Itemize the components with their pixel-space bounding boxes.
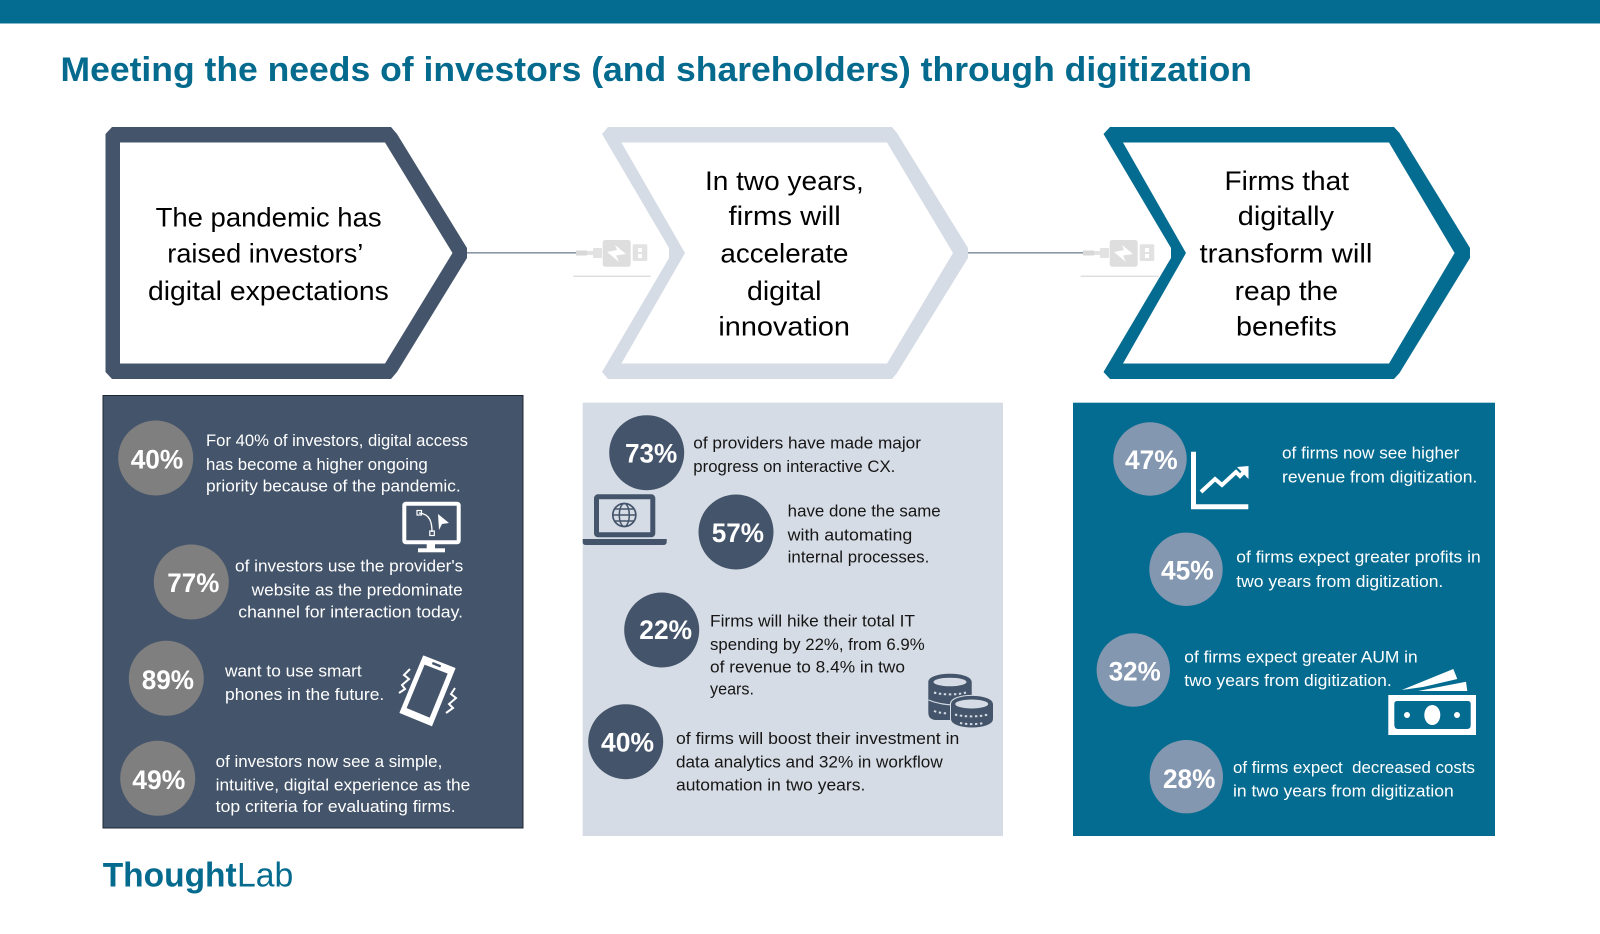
stat: 89% smart phones: phones in the future. [225,686,384,704]
stat: 49% digital experience: of investors now see a simple, [216,753,442,771]
chevron: reap the benefits: digitally [1238,201,1335,231]
stat: 89% smart phones: want to use smart [224,663,362,681]
stat: 77% website: website as the predominate [251,582,463,600]
stat: 49% digital experience: 49% [132,765,185,795]
stat: 40% data analytics: 40% [601,727,654,757]
stat: 49% digital experience: intuitive, digital experience as the [216,776,470,794]
chevron: reap the benefits [1104,127,1470,379]
stat: 28% decreased costs: of firms expect decreased costs [1233,759,1475,777]
stat: 47% higher revenue: 47% [1125,445,1178,475]
stat: 40% digital access: For 40% of investors, digital access [206,432,468,450]
stat: 73% interactive CX: progress on interactive CX. [693,458,895,476]
stat: 40% digital access: 40% [131,444,183,474]
stat: 40% data analytics: data analytics and 32% in workflow [676,754,943,772]
icon: vibrating smartphone [399,656,456,726]
panel: investors [103,396,523,828]
stat: 57% automating processes: have done the same [788,503,941,521]
icon: laptop with globe [583,497,667,545]
stat: 77% website: of investors use the provider's [235,558,463,576]
stat: 40% digital access: priority because of the pandemic. [206,478,461,496]
stat: 40% data analytics: of firms will boost their investment in [676,730,959,748]
chevron: accelerate innovation: firms will [728,201,841,231]
stat: 45% greater profits: of firms expect greater profits in [1236,548,1481,566]
chevron: pandemic expectations: digital expectations [148,276,389,306]
chevron: pandemic expectations: raised investors’ [167,239,363,269]
stat: 28% decreased costs [1150,740,1475,813]
stat: 45% greater profits: two years from digitization. [1236,573,1443,591]
stat: 47% higher revenue: revenue from digitization. [1282,468,1477,486]
stat: 40% digital access: has become a higher ongoing [206,456,428,474]
stat: 45% greater profits: 45% [1161,555,1214,585]
stat: 32% greater AUM [1097,633,1418,707]
top banner [0,0,1600,24]
stat: 22% IT spending: spending by 22%, from 6.9% [710,636,925,654]
icon: banknotes [1388,669,1476,735]
stat: 40% data analytics [588,704,959,795]
stat: 32% greater AUM: 32% [1109,656,1161,686]
chevron: accelerate innovation: In two years, [705,166,864,196]
stat: 89% smart phones [129,641,384,716]
stat: 47% higher revenue: of firms now see higher [1282,444,1460,462]
stat: 57% automating processes: internal processes. [788,548,929,566]
stat: 73% interactive CX [609,415,922,490]
stat: 77% website: 77% [167,568,219,598]
chevron: accelerate innovation [602,127,968,379]
chevron: reap the benefits: benefits [1236,312,1337,342]
chevron: accelerate innovation: digital [747,276,821,306]
stat: 22% IT spending: of revenue to 8.4% in two [710,659,905,677]
panel: benefits [1073,403,1495,836]
title: Meeting the needs of investors (and shareholders) through digitization [60,51,1252,89]
stat: 47% higher revenue [1113,422,1477,496]
stat: 89% smart phones: 89% [142,665,194,695]
stat: 28% decreased costs: in two years from digitization [1233,783,1454,801]
stat: 40% data analytics: automation in two years. [676,777,865,795]
stat: 32% greater AUM: of firms expect greater AUM in [1184,648,1418,666]
stat: 77% website [154,544,463,621]
chevron: pandemic expectations [106,127,467,379]
logo: ThoughtLab: Lab [237,857,293,895]
icon: stacks of coins [928,674,994,728]
stat: 45% greater profits [1149,533,1481,606]
stat: 22% IT spending [624,592,925,699]
stat: 57% automating processes: 57% [712,518,764,548]
stat: 77% website: channel for interaction today. [238,603,463,621]
stat: 28% decreased costs: 28% [1163,764,1215,794]
chevron: accelerate innovation: innovation [718,312,850,342]
stat: 22% IT spending: years. [710,681,754,699]
logo: ThoughtLab: Thought [103,857,237,895]
chevron: accelerate innovation: accelerate [720,238,848,268]
arrow: connector from first to second chevron [467,240,651,277]
stat: 32% greater AUM: two years from digitization. [1184,672,1392,690]
stat: 49% digital experience [120,741,470,816]
stat: 22% IT spending: 22% [639,615,692,645]
chevron: reap the benefits: transform will [1200,238,1372,268]
stat: 57% automating processes: with automating [787,527,912,545]
arrow: connector from second to third chevron [968,240,1159,277]
icon: monitor with vector cursor [404,504,459,552]
stat: 22% IT spending: Firms will hike their total IT [710,612,915,630]
stat: 57% automating processes [698,494,941,570]
chevron: pandemic expectations: The pandemic has [156,203,382,233]
chevron: reap the benefits: reap the [1235,276,1338,306]
stat: 73% interactive CX: 73% [625,438,677,468]
chevron: reap the benefits: Firms that [1224,166,1350,196]
panel: digital innovation [583,403,1003,836]
stat: 40% digital access [118,420,468,496]
icon: rising line chart [1194,452,1248,507]
stat: 73% interactive CX: of providers have made major [693,434,922,452]
stat: 49% digital experience: top criteria for evaluating firms. [216,798,456,816]
